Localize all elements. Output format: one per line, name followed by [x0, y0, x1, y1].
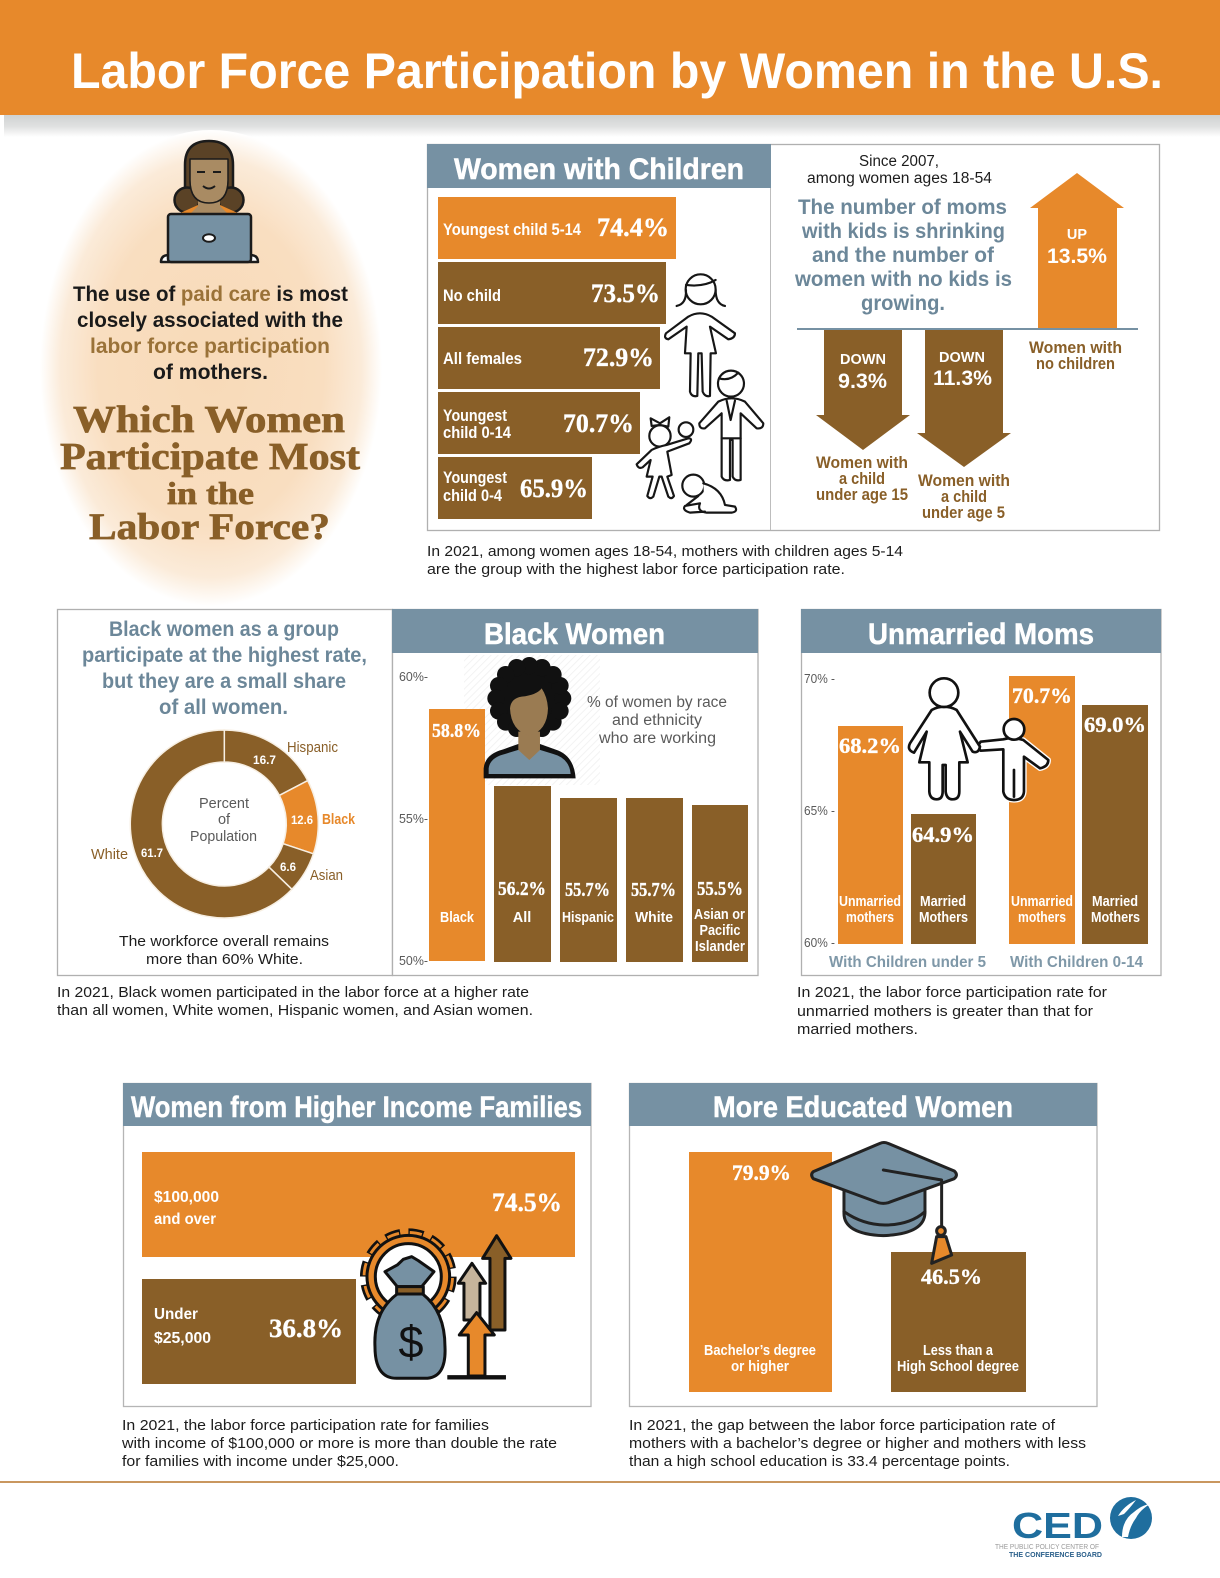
bar chart: by race: 58.8%: [432, 720, 481, 742]
panel: unmarried moms: [801, 609, 1161, 976]
caption: women with children: [427, 543, 903, 578]
icon: black woman portrait: [484, 657, 576, 778]
panel: black women share donut: [58, 610, 392, 976]
bar chart: by race: Black: [440, 910, 475, 926]
bar chart: by age of child: 70.7%: [563, 409, 634, 438]
arrow: down child under 5: DOWN: [939, 350, 985, 366]
donut chart: percent of population: 61.7: [141, 848, 163, 860]
donut chart: percent of population: Population: [190, 829, 257, 845]
bar chart: unmarried vs married: mothers: [846, 910, 894, 926]
arrow: up women with no children: Women with: [1029, 339, 1122, 357]
text: paid care statement: closely associated with the: [77, 308, 343, 332]
text: paid care statement: of mothers.: [153, 360, 268, 384]
bar chart: by race: 55.5%: [697, 878, 743, 900]
icon: money bag with gear and arrows: [365, 1233, 511, 1378]
axis labels: 70% -: [804, 672, 835, 686]
bar chart: by race: 55.7%: [631, 879, 676, 901]
arrow: up women with no children: [1029, 173, 1124, 373]
caption: black women: In 2021, Black women participated in the labor force at a higher rate: [57, 984, 529, 1001]
bar chart: unmarried vs married: [838, 676, 1148, 944]
logo: CED: [995, 1497, 1152, 1559]
axis labels: 60% -: [804, 936, 835, 950]
group labels: With Children under 5: [829, 954, 986, 971]
bar chart: income: $25,000: [154, 1330, 211, 1347]
arrow: down child under 15: DOWN: [840, 352, 886, 368]
bar chart: education: 79.9%: [732, 1160, 791, 1185]
bar chart: unmarried vs married: Mothers: [1091, 910, 1140, 926]
bar chart: unmarried vs married: Unmarried: [1011, 894, 1073, 910]
heading: More Educated Women: [713, 1091, 1013, 1124]
bar chart: education: Less than a: [923, 1343, 994, 1359]
caption: unmarried moms: In 2021, the labor force participation rate for: [797, 984, 1107, 1001]
panel: women with children: [427, 144, 1160, 530]
bar chart: by race: All: [513, 910, 531, 926]
donut chart: percent of population: Black: [322, 812, 356, 828]
text: since 2007: among women ages 18-54: [807, 170, 992, 187]
panel: higher income families: [123, 1083, 591, 1406]
icon: graduation cap: [812, 1142, 956, 1263]
callout: moms shrinking: [794, 196, 1012, 315]
caption: black women: [57, 984, 533, 1019]
bar chart: income: and over: [154, 1211, 216, 1228]
caption: women with children: In 2021, among women ages 18-54, mothers with children ages 5-14: [427, 543, 903, 560]
bar chart: by age of child: 72.9%: [583, 343, 654, 372]
bar chart: by race: Islander: [695, 939, 745, 955]
caption: income: with income of $100,000 or more is more than double the rate: [121, 1435, 557, 1452]
caption: education: In 2021, the gap between the labor force participation rate of: [629, 1417, 1056, 1434]
bar chart: by age of child: Youngest: [443, 407, 507, 425]
donut chart: percent of population: [91, 730, 356, 918]
arrow: down child under 15: [816, 330, 910, 504]
callout: highest rate small share: of all women.: [159, 696, 288, 719]
bar chart: by race: White: [635, 910, 673, 926]
text: percent of women by race: who are working: [598, 730, 716, 747]
logo: CED: THE CONFERENCE BOARD: [1009, 1552, 1102, 1559]
text: workforce remains white: [119, 933, 329, 968]
bar chart: by race: Asian or: [694, 907, 745, 923]
bar chart: by age of child: 65.9%: [520, 474, 588, 503]
text: since 2007: [807, 153, 992, 187]
bar chart: by age of child: Youngest: [443, 469, 507, 487]
axis labels: 65% -: [804, 804, 835, 818]
bar chart: by race: Pacific: [700, 923, 740, 939]
donut chart: percent of population: Asian: [310, 868, 343, 884]
text: workforce remains white: The workforce overall remains: [119, 933, 329, 950]
arrow: down child under 5: [917, 330, 1011, 522]
arrow: down child under 5: 11.3%: [933, 367, 992, 390]
caption: education: [629, 1417, 1086, 1470]
bar chart: by age of child: 74.4%: [597, 213, 669, 242]
callout: moms shrinking: growing.: [861, 292, 945, 315]
text: workforce remains white: more than 60% White.: [146, 951, 303, 968]
icon: woman at laptop: [161, 141, 258, 262]
axis labels: 50%-: [399, 954, 428, 968]
arrow: down child under 15: under age 15: [816, 486, 908, 504]
bar chart: by race: [429, 709, 748, 962]
heading: which women participate most: Participate Most: [60, 436, 360, 478]
panel: black women chart: [392, 609, 758, 976]
caption: income: [121, 1417, 557, 1470]
callout: highest rate small share: participate at the highest rate,: [82, 644, 367, 667]
donut chart: percent of population: Percent: [199, 796, 249, 812]
caption: unmarried moms: unmarried mothers is greater than that for: [797, 1003, 1093, 1020]
text: percent of women by race: [587, 694, 727, 747]
axis labels: [804, 672, 835, 950]
donut chart: percent of population: 6.6: [280, 862, 296, 874]
title: Labor Force Participation by Women in the U.S.: [71, 43, 1163, 99]
heading: Unmarried Moms: [868, 618, 1094, 651]
bar chart: income: 74.5%: [492, 1188, 562, 1217]
text: paid care statement: labor force participation: [90, 334, 330, 358]
bar chart: by race: Hispanic: [562, 910, 614, 926]
caption: unmarried moms: married mothers.: [797, 1021, 918, 1038]
text: since 2007: Since 2007,: [859, 153, 939, 170]
panel: intro oval: [40, 130, 382, 606]
donut chart: percent of population: 12.6: [291, 815, 313, 827]
donut chart: percent of population: 16.7: [253, 755, 276, 767]
bar chart: by age of child: Youngest child 5-14: [443, 221, 582, 239]
arrow: up women with no children: UP: [1067, 227, 1087, 243]
arrow: up women with no children: 13.5%: [1047, 245, 1107, 268]
group labels: With Children 0-14: [1010, 954, 1143, 971]
donut chart: percent of population: Hispanic: [287, 740, 338, 756]
text: paid care statement: [73, 282, 348, 384]
bar chart: unmarried vs married: mothers: [1018, 910, 1066, 926]
bar chart: by age of child: child 0-4: [443, 487, 503, 505]
caption: education: mothers with a bachelor’s degree or higher and mothers with less: [629, 1435, 1086, 1452]
bar chart: by age of child: 73.5%: [591, 279, 660, 308]
bar chart: unmarried vs married: 70.7%: [1012, 683, 1072, 708]
callout: moms shrinking: and the number of: [812, 244, 995, 267]
logo: CED: THE PUBLIC POLICY CENTER OF: [995, 1542, 1099, 1551]
arrow: down child under 5: Women with: [918, 472, 1010, 490]
caption: black women: than all women, White women, Hispanic women, and Asian women.: [57, 1002, 533, 1019]
bar chart: by age of child: [438, 197, 676, 519]
arrow: down child under 5: under age 5: [922, 504, 1005, 522]
text: paid care statement: The use of paid care is most: [73, 282, 348, 306]
bar chart: income: Under: [154, 1306, 198, 1323]
callout: moms shrinking: with kids is shrinking: [801, 220, 1005, 243]
heading: Black Women: [484, 618, 665, 651]
bar chart: income: [142, 1152, 575, 1384]
logo: CED: CED: [1012, 1505, 1103, 1546]
bar chart: unmarried vs married: 69.0%: [1084, 712, 1146, 737]
heading: which women participate most: [60, 399, 360, 548]
caption: income: In 2021, the labor force participation rate for families: [122, 1417, 489, 1434]
callout: highest rate small share: [82, 618, 367, 719]
heading: Women with Children: [454, 153, 744, 186]
callout: moms shrinking: women with no kids is: [794, 268, 1012, 291]
bar chart: by race: 56.2%: [498, 878, 546, 900]
axis labels: 60%-: [399, 670, 428, 684]
arrow: down child under 5: a child: [941, 488, 987, 506]
callout: highest rate small share: but they are a small share: [102, 670, 346, 693]
bar chart: by age of child: All females: [443, 350, 522, 368]
axis labels: [399, 670, 428, 968]
bar chart: by age of child: No child: [443, 287, 501, 305]
panel: more educated women: [629, 1083, 1097, 1406]
bar chart: income: $100,000: [154, 1189, 219, 1206]
bar chart: unmarried vs married: 68.2%: [839, 733, 901, 758]
bar chart: by race: 55.7%: [565, 879, 610, 901]
caption: income: for families with income under $25,000.: [122, 1453, 399, 1470]
bar chart: education: or higher: [731, 1359, 789, 1375]
axis labels: 55%-: [399, 812, 428, 826]
arrow: up women with no children: no children: [1036, 355, 1115, 373]
bar chart: unmarried vs married: Mothers: [919, 910, 968, 926]
heading: which women participate most: Labor Force?: [89, 507, 330, 548]
donut chart: percent of population: of: [218, 812, 231, 828]
text: percent of women by race: and ethnicity: [612, 712, 702, 729]
heading: Women from Higher Income Families: [131, 1091, 582, 1124]
group labels: [829, 954, 1143, 971]
heading: which women participate most: Which Women: [73, 399, 345, 441]
icon: money bag with gear and arrows: $: [398, 1316, 423, 1367]
bar chart: unmarried vs married: Unmarried: [839, 894, 901, 910]
callout: moms shrinking: The number of moms: [798, 196, 1007, 219]
bar chart: education: 46.5%: [921, 1264, 982, 1289]
bar chart: unmarried vs married: Married: [1092, 894, 1138, 910]
header banner: [0, 0, 1220, 137]
callout: highest rate small share: Black women as a group: [109, 618, 339, 641]
bar chart: education: High School degree: [897, 1359, 1019, 1375]
bar chart: education: Bachelor’s degree: [704, 1343, 816, 1359]
caption: education: than a high school education is 33.4 percentage points.: [629, 1453, 1010, 1470]
bar chart: unmarried vs married: Married: [920, 894, 966, 910]
donut chart: percent of population: White: [91, 847, 128, 863]
arrow: down child under 15: Women with: [816, 454, 908, 472]
bar chart: by age of child: child 0-14: [443, 424, 512, 442]
icon: family: [637, 274, 763, 513]
bar chart: education: [689, 1152, 1026, 1392]
arrow: down child under 15: a child: [839, 470, 885, 488]
arrow: down child under 15: 9.3%: [838, 370, 887, 393]
caption: women with children: are the group with the highest labor force participation rate.: [427, 561, 845, 578]
bar chart: unmarried vs married: 64.9%: [912, 822, 974, 847]
heading: which women participate most: in the: [167, 475, 254, 511]
icon: mother and child: [909, 678, 1048, 800]
caption: unmarried moms: [797, 984, 1107, 1038]
bar chart: income: 36.8%: [269, 1314, 343, 1343]
text: percent of women by race: % of women by race: [587, 694, 727, 711]
